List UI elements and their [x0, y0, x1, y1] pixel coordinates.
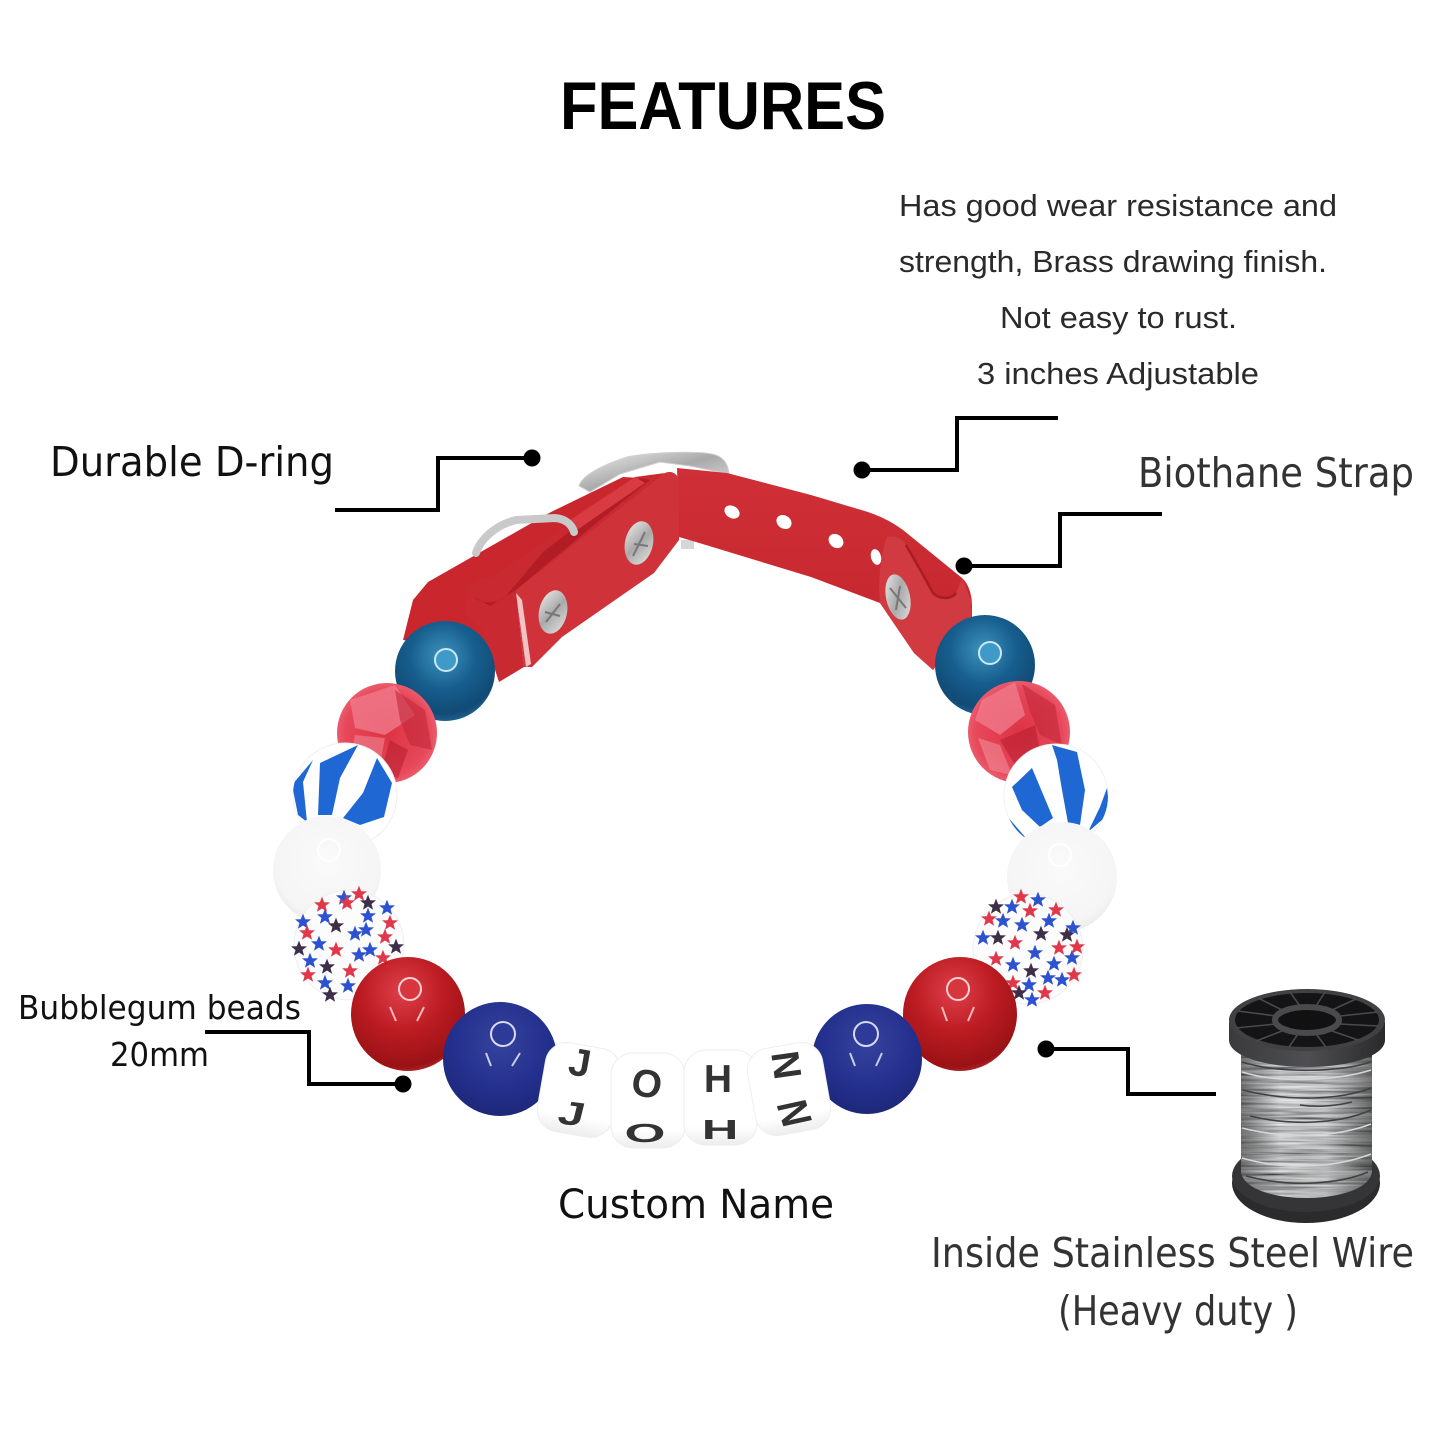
- label: Bubblegum beads: 20mm: [110, 1035, 209, 1074]
- strap: left loop opening: [474, 478, 650, 606]
- bead: faceted red: [968, 681, 1070, 783]
- label: Bubblegum beads: [18, 988, 301, 1074]
- bead: white: [1007, 822, 1117, 932]
- label: Bubblegum beads: Bubblegum beads: [18, 988, 301, 1027]
- cube: H: [684, 1050, 757, 1145]
- beads: right side: [812, 615, 1117, 1114]
- strap: adjustment holes: [722, 503, 883, 566]
- text block: buckle description: Not easy to rust.: [1000, 300, 1237, 335]
- bead: teal pearl: [935, 615, 1035, 715]
- leader: Biothane Strap: [956, 514, 1162, 574]
- rivets: [535, 519, 915, 636]
- cube: J: [534, 1039, 624, 1141]
- bead: faceted red: [337, 683, 437, 783]
- label: Inside Stainless Steel Wire: [931, 1229, 1414, 1335]
- buckle: [579, 452, 729, 549]
- strap: middle band: [570, 477, 645, 530]
- strap: right side: [677, 468, 972, 670]
- beads: left side: [273, 621, 557, 1116]
- strap: right keeper fold: [879, 536, 972, 670]
- bead: stars: [973, 889, 1085, 1007]
- cube: O: [611, 1053, 685, 1148]
- bead: navy: [812, 1004, 922, 1114]
- text block: buckle description: strength, Brass drawing finish.: [899, 244, 1327, 279]
- leader: Bubblegum beads: [205, 1032, 412, 1092]
- title: FEATURES: [560, 68, 886, 144]
- bead: blue striped: [292, 743, 397, 847]
- text block: buckle description: [899, 188, 1337, 391]
- label: Durable D-ring: Durable D-ring: [50, 438, 334, 486]
- bead: red pearl: [351, 957, 465, 1071]
- spool: top flange: [1229, 989, 1385, 1067]
- bead: blue striped: [1004, 744, 1108, 838]
- bead: navy: [443, 1002, 557, 1116]
- cube: H: H: [704, 1058, 732, 1101]
- letter cubes: JOHN: [534, 1039, 834, 1148]
- spool: bottom flange: [1232, 1140, 1380, 1223]
- collar: [273, 452, 1117, 1148]
- cube: N: N: [767, 1096, 820, 1131]
- label: Custom Name: Custom Name: [558, 1182, 834, 1228]
- leader: buckle description: [854, 418, 1058, 478]
- cube: O: O: [625, 1119, 665, 1148]
- D-ring: [476, 518, 574, 553]
- bead: white: [273, 816, 381, 924]
- spool: wire: [1241, 1050, 1372, 1198]
- bead: stars: [291, 886, 404, 1002]
- bead: teal pearl: [395, 621, 495, 721]
- strap: left front panel: [516, 472, 679, 667]
- strap: rear layer: [403, 477, 645, 650]
- label: Biothane Strap: Biothane Strap: [1138, 449, 1414, 497]
- cube: N: N: [762, 1048, 809, 1082]
- cube: O: O: [628, 1061, 665, 1108]
- icon: wire spool: [1229, 989, 1385, 1223]
- bead: red pearl: [903, 957, 1017, 1071]
- leader: Durable D-ring: [335, 450, 540, 510]
- leader: steel wire: [1038, 1040, 1216, 1094]
- strap: left lip: [465, 473, 665, 682]
- cube: J: J: [554, 1093, 589, 1134]
- cube: H: H: [702, 1114, 738, 1145]
- strap: white edge: [516, 593, 531, 667]
- cube: N: [744, 1039, 834, 1139]
- text block: buckle description: 3 inches Adjustable: [977, 356, 1259, 391]
- cube: J: J: [565, 1040, 594, 1087]
- label: Inside Stainless Steel Wire: (Heavy duty ): [1058, 1287, 1298, 1335]
- text block: buckle description: Has good wear resistance and: [899, 188, 1337, 223]
